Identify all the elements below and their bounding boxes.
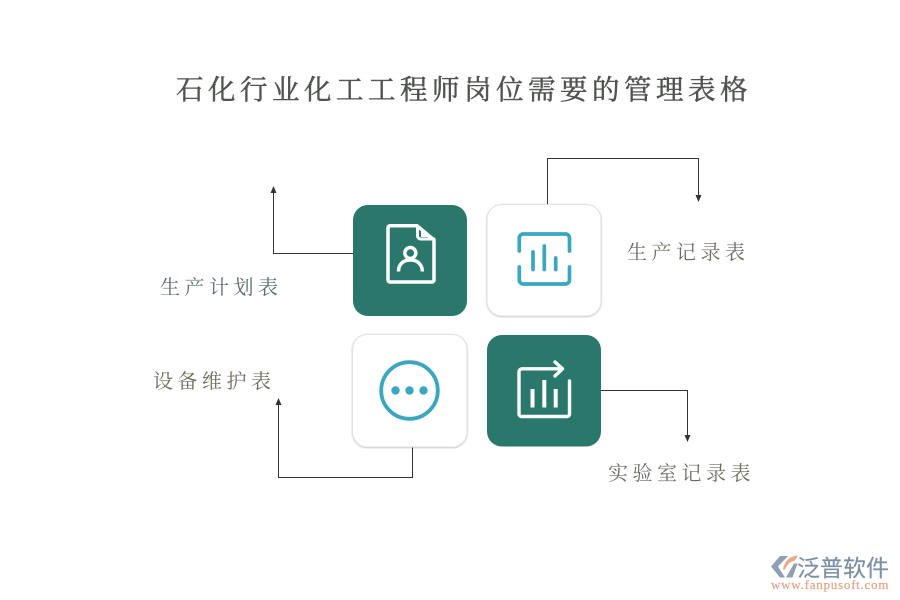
panel: production record card xyxy=(487,204,601,316)
logo url: www.fanpusoft.com xyxy=(771,577,889,592)
arrow: equipment maintenance xyxy=(276,398,412,478)
label: laboratory record: 实验室记录表 xyxy=(608,462,755,485)
arrow: production record xyxy=(548,158,702,204)
logo: fanpusoft xyxy=(771,555,889,592)
panel: laboratory record card xyxy=(487,335,601,446)
arrow: production plan xyxy=(270,186,353,254)
label: equipment maintenance: 设备维护表 xyxy=(153,370,276,393)
icon: bar chart with arrow xyxy=(519,362,570,416)
logo name: 泛普软件 xyxy=(797,555,889,581)
icon: circle with dots xyxy=(381,362,438,419)
label: production record: 生产记录表 xyxy=(627,241,750,264)
title: 石化行业化工工程师岗位需要的管理表格 xyxy=(176,74,752,105)
logo mark xyxy=(771,556,798,578)
arrow: laboratory record xyxy=(601,390,690,442)
icon: scan bar chart xyxy=(519,234,570,284)
label: production plan: 生产计划表 xyxy=(160,276,282,299)
panel: production plan card xyxy=(353,205,467,316)
panel: equipment maintenance card xyxy=(352,334,467,447)
icon: document with person xyxy=(388,226,434,282)
